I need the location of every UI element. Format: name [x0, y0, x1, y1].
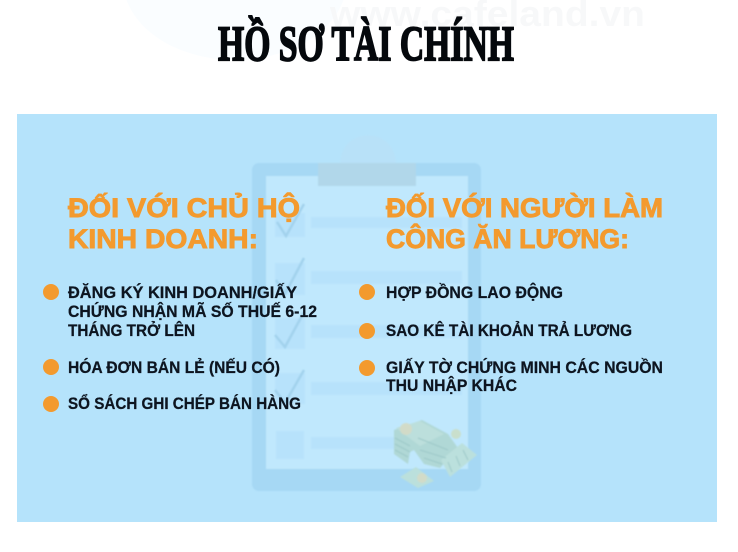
title: HỒ SƠ TÀI CHÍNH: [218, 14, 514, 71]
list item: other income documents: THU NHẬP KHÁC: [386, 376, 517, 395]
panel: salaried workers: [359, 191, 663, 395]
list item: business registration: [43, 283, 317, 340]
list item: business registration: CHỨNG NHẬN MÃ SỐ THUẾ 6-12: [68, 301, 317, 321]
list item: retail invoices: HÓA ĐƠN BÁN LẺ (NẾU CÓ): [68, 358, 280, 377]
panel: business owners: [43, 191, 317, 413]
list item: sales records: SỔ SÁCH GHI CHÉP BÁN HÀNG: [68, 394, 301, 413]
list item: other income documents: GIẤY TỜ CHỨNG MINH CÁC NGUỒN: [386, 358, 663, 377]
icon: money stack: [394, 420, 477, 488]
heading: business owners: ĐỐI VỚI CHỦ HỘ: [68, 191, 300, 223]
heading: business owners: [68, 191, 300, 254]
list item: salary statement: SAO KÊ TÀI KHOẢN TRẢ LƯƠNG: [386, 321, 632, 340]
heading: salaried workers: ĐỐI VỚI NGƯỜI LÀM: [386, 191, 663, 223]
heading: salaried workers: [386, 191, 663, 254]
list item: business registration: ĐĂNG KÝ KINH DOANH/GIẤY: [68, 283, 297, 302]
icon: clipboard watermark: [252, 135, 481, 491]
list item: other income documents: [359, 358, 663, 395]
heading: salaried workers: CÔNG ĂN LƯƠNG:: [386, 223, 629, 254]
panel: background: [17, 114, 717, 522]
list item: labour contract: HỢP ĐỒNG LAO ĐỘNG: [386, 283, 563, 302]
list item: business registration: THÁNG TRỞ LÊN: [68, 321, 195, 340]
heading: business owners: KINH DOANH:: [68, 224, 258, 254]
